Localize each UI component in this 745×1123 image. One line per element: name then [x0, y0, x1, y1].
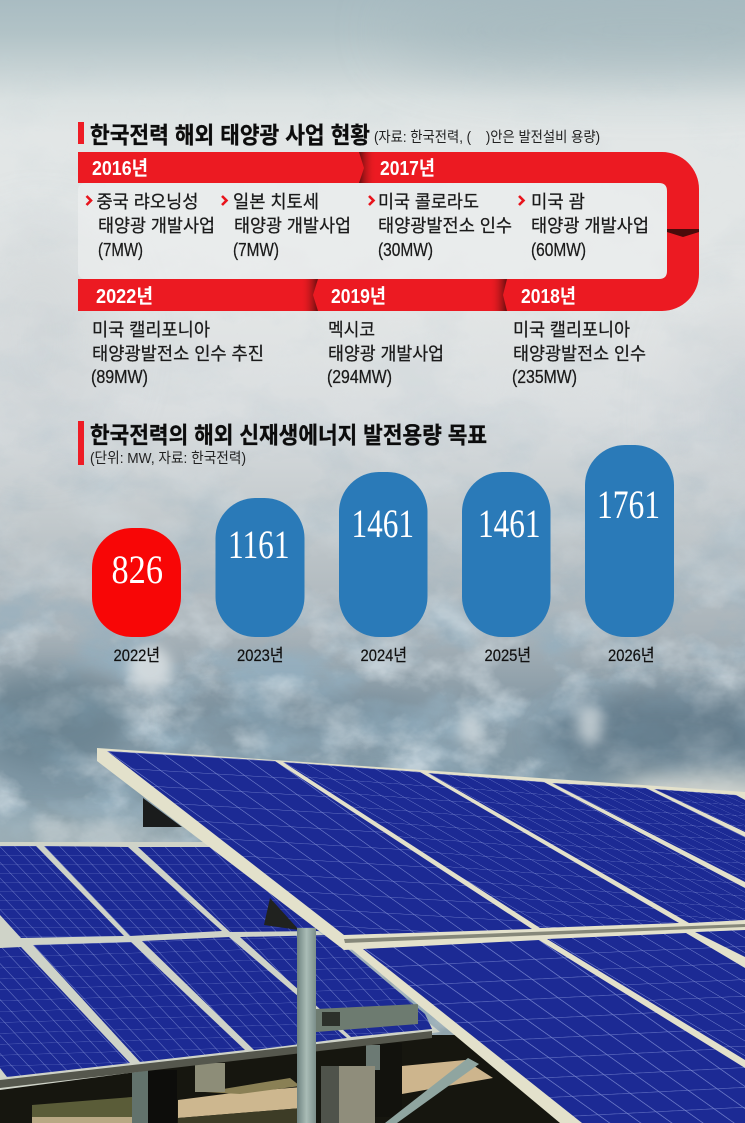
bar: 2022 — [92, 528, 181, 665]
timeline: red band — [78, 152, 699, 311]
project: US Colorado 2017: (30MW) — [378, 240, 433, 260]
timeline: year labels: 2022년 — [96, 285, 153, 308]
project: Japan Chitose 2016: (7MW) — [233, 240, 279, 260]
bar: 2023: 1161 — [228, 522, 290, 567]
project: US California 2022: 태양광발전소 인수 추진 — [92, 344, 264, 364]
project: US California 2022 — [91, 320, 264, 387]
project: Mexico 2019: 멕시코 — [328, 320, 375, 340]
project: Japan Chitose 2016: 태양광 개발사업 — [234, 216, 351, 236]
photo: ground and support structure — [0, 1035, 560, 1123]
heading: overseas solar projects: 한국전력 해외 태양광 사업 현황 — [90, 122, 370, 148]
heading: renewable capacity targets — [78, 421, 487, 467]
project: Mexico 2019: 태양광 개발사업 — [328, 344, 444, 364]
project: Mexico 2019: (294MW) — [327, 367, 392, 387]
project: Japan Chitose 2016 — [222, 192, 351, 260]
timeline: year labels: 2017년 — [380, 157, 435, 180]
project: US Guam 2017: 태양광 개발사업 — [531, 216, 649, 236]
heading: overseas solar projects: (자료: 한국전력, ( )안은 발전설비 용량) — [374, 129, 600, 146]
project: US Colorado 2017: 태양광발전소 인수 — [378, 216, 512, 236]
timeline: year labels: 2019년 — [331, 285, 386, 308]
bar: 2024: 1461 — [352, 501, 414, 546]
project: Mexico 2019 — [327, 320, 444, 387]
project: US California 2022: (89MW) — [91, 367, 148, 387]
project: China Liaoning 2016: 태양광 개발사업 — [98, 216, 215, 236]
heading: overseas solar projects — [78, 122, 600, 148]
bar: 2025: 2025년 — [484, 646, 531, 665]
project: US Guam 2017: 미국 괌 — [531, 192, 585, 212]
timeline: year labels — [92, 157, 576, 308]
photo: rear solar array — [0, 842, 440, 1090]
bar: 2023: 2023년 — [237, 646, 284, 665]
heading: renewable capacity targets: 한국전력의 해외 신재생에너지 발전용량 목표 — [90, 422, 487, 448]
project: US Colorado 2017 — [369, 192, 512, 260]
project: China Liaoning 2016 — [86, 192, 215, 260]
project: US Colorado 2017: 미국 콜로라도 — [378, 192, 479, 212]
bar: 2026: 1761 — [597, 482, 660, 527]
bar: 2024 — [339, 472, 428, 665]
project: US California 2018: (235MW) — [512, 367, 577, 387]
project: US Guam 2017 — [519, 192, 649, 260]
chart: capacity pills — [92, 445, 674, 665]
timeline: year labels: 2018년 — [521, 285, 576, 308]
project: US California 2018: 미국 캘리포니아 — [513, 320, 630, 340]
photo: main solar array — [97, 748, 745, 1123]
bar: 2025: 1461 — [478, 501, 540, 546]
project: US California 2018 — [512, 320, 646, 387]
project: Japan Chitose 2016: 일본 치토세 — [233, 192, 319, 212]
bar: 2026: 2026년 — [608, 646, 654, 665]
project: US Guam 2017: (60MW) — [531, 240, 586, 260]
project: US California 2022: 미국 캘리포니아 — [92, 320, 210, 340]
project: China Liaoning 2016: 중국 랴오닝성 — [96, 192, 198, 212]
bar: 2026 — [585, 445, 674, 665]
project: China Liaoning 2016: (7MW) — [98, 240, 143, 260]
project: US California 2018: 태양광발전소 인수 — [513, 344, 646, 364]
bar: 2025 — [462, 472, 550, 665]
bar: 2023 — [216, 498, 304, 665]
photo: support pole and brackets — [143, 798, 418, 1123]
bar: 2022: 2022년 — [114, 646, 160, 665]
heading: renewable capacity targets: (단위: MW, 자료: 한국전력) — [90, 450, 246, 467]
timeline: year labels: 2016년 — [92, 157, 148, 180]
bar: 2022: 826 — [112, 547, 163, 592]
bar: 2024: 2024년 — [360, 646, 407, 665]
